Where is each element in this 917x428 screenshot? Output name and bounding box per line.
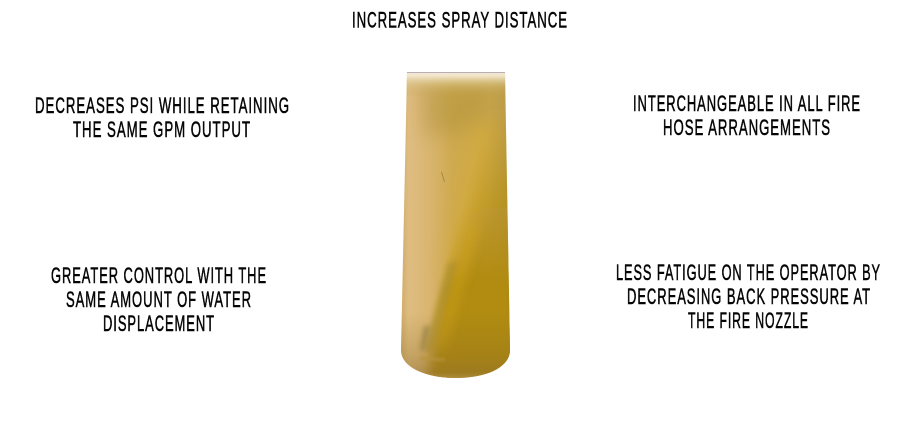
text block: decreases psi: DECREASES PSI WHILE RETAINING — [35, 93, 290, 118]
text block: greater control: DISPLACEMENT — [103, 311, 215, 336]
heading: increases spray distance: INCREASES SPRAY DISTANCE — [352, 8, 568, 32]
text block: less fatigue: THE FIRE NOZZLE — [688, 308, 809, 333]
text block: greater control: GREATER CONTROL WITH THE — [51, 263, 267, 288]
text block: greater control: SAME AMOUNT OF WATER — [66, 287, 252, 312]
text block: less fatigue — [616, 260, 881, 333]
text block: decreases psi — [35, 93, 290, 142]
text block: decreases psi: THE SAME GPM OUTPUT — [73, 117, 251, 142]
text block: interchangeable — [633, 91, 861, 140]
product: tapered yellow fire nozzle insert tube — [401, 72, 510, 378]
infographic canvas — [36, 12, 880, 378]
rim highlight — [407, 72, 505, 74]
text block: greater control — [51, 263, 267, 336]
